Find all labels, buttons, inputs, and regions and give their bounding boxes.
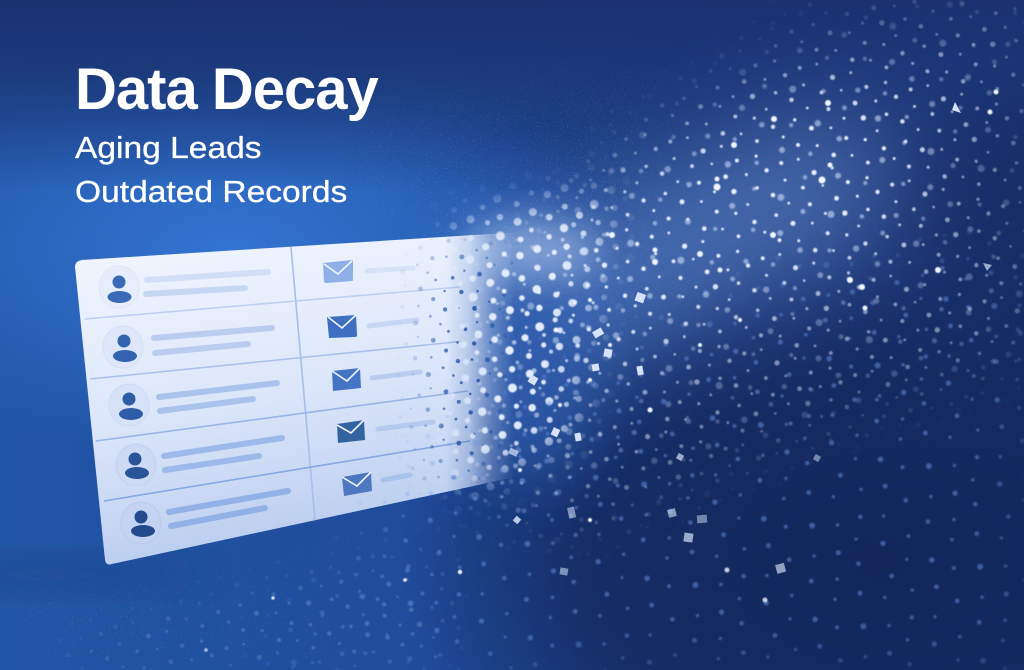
glow: particle stream haze	[460, 120, 900, 480]
bright particles	[204, 90, 998, 652]
row 4 email	[337, 420, 433, 443]
heading: Data Decay	[75, 57, 378, 122]
row 4 contact	[116, 438, 282, 486]
table dividers	[85, 247, 470, 520]
row 2 email	[327, 315, 417, 338]
row 5 contact	[121, 491, 288, 544]
particles: card dissolving edge	[398, 165, 634, 511]
row 1 contact	[99, 266, 268, 308]
row 2 contact	[103, 326, 272, 368]
subtitle: aging leads: Aging Leads	[75, 131, 262, 165]
shard fragments	[508, 102, 992, 576]
row 3 email	[332, 368, 420, 391]
row 1 email	[323, 260, 413, 283]
subtitle: outdated records: Outdated Records	[75, 175, 347, 209]
row 3 contact	[109, 383, 277, 426]
card panel	[75, 232, 520, 564]
row 5 email	[342, 472, 410, 496]
title block	[74, 57, 378, 209]
contact card table	[75, 232, 520, 564]
